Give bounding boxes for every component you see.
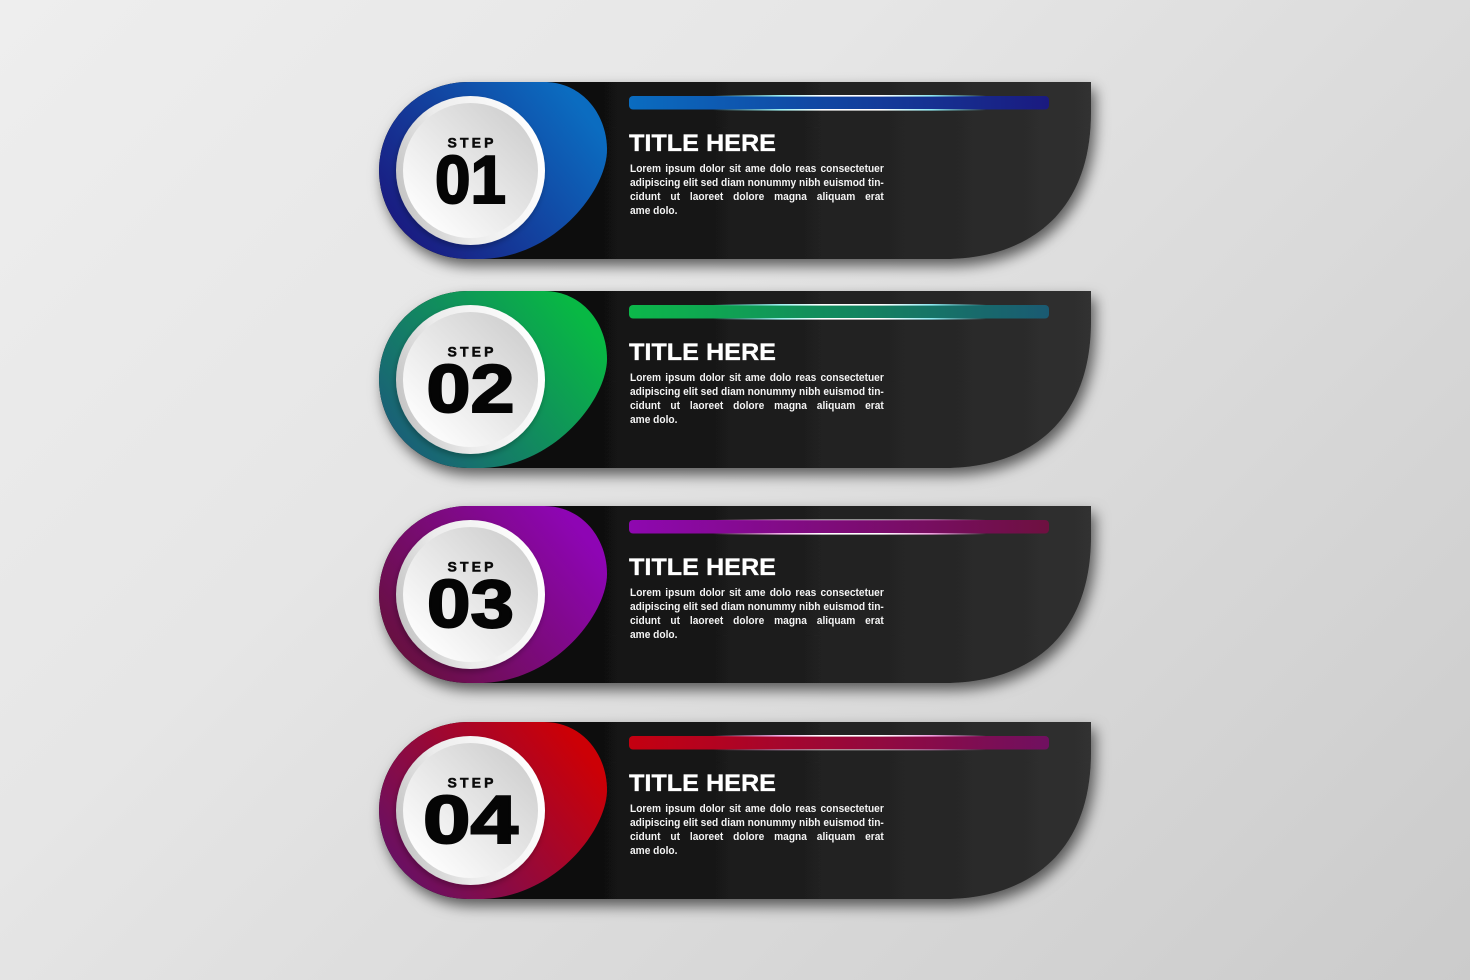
body text — [630, 372, 884, 426]
badge: step number: STEP — [448, 774, 494, 790]
badge: step number: STEP — [448, 558, 494, 574]
body text: ame dolo. — [630, 414, 677, 426]
body text: Lorem ipsum dolor sit ame dolo reas consectetuer — [630, 587, 884, 599]
body text: Lorem ipsum dolor sit ame dolo reas consectetuer — [630, 803, 884, 815]
title: TITLE HERE — [629, 554, 776, 581]
accent bar — [629, 94, 1049, 110]
card background — [379, 722, 1091, 899]
body text: adipiscing elit sed diam nonummy nibh euismod tin- — [630, 601, 884, 613]
body text: adipiscing elit sed diam nonummy nibh euismod tin- — [630, 817, 884, 829]
badge: step number: 03 — [427, 566, 514, 642]
title: TITLE HERE — [629, 770, 776, 797]
title: TITLE HERE — [629, 338, 776, 366]
body text: cidunt ut laoreet dolore magna aliquam erat — [630, 190, 884, 202]
title: TITLE HERE — [629, 130, 776, 156]
body text: Lorem ipsum dolor sit ame dolo reas consectetuer — [630, 372, 884, 384]
card background — [379, 82, 1091, 258]
panel: step 04 — [373, 718, 1105, 916]
body text: ame dolo. — [630, 204, 677, 216]
card background — [379, 290, 1091, 468]
accent bar — [629, 735, 1049, 750]
badge: step number — [396, 304, 545, 454]
panel: step 01 — [373, 78, 1106, 276]
body text: adipiscing elit sed diam nonummy nibh euismod tin- — [630, 176, 884, 188]
body text: adipiscing elit sed diam nonummy nibh euismod tin- — [630, 386, 884, 398]
badge: step number: 02 — [426, 350, 514, 426]
panel: step 02 — [373, 288, 1106, 486]
badge: step number: STEP — [448, 343, 494, 359]
body text: ame dolo. — [630, 629, 677, 641]
coloured blob — [379, 290, 607, 468]
badge: step number — [396, 96, 545, 244]
body text — [630, 803, 884, 857]
coloured blob — [379, 82, 607, 258]
badge: step number: 01 — [435, 142, 506, 218]
badge: step number — [396, 520, 545, 669]
panel: step 03 — [373, 502, 1106, 700]
accent bar — [629, 304, 1049, 319]
body text — [630, 587, 884, 641]
coloured blob — [379, 722, 607, 899]
body text: cidunt ut laoreet dolore magna aliquam erat — [630, 615, 884, 627]
badge: step number: 04 — [423, 782, 518, 858]
body text: Lorem ipsum dolor sit ame dolo reas consectetuer — [630, 162, 884, 174]
body text: cidunt ut laoreet dolore magna aliquam erat — [630, 831, 884, 843]
badge: step number — [396, 736, 545, 885]
body text: ame dolo. — [630, 845, 677, 857]
body text: cidunt ut laoreet dolore magna aliquam erat — [630, 400, 884, 412]
coloured blob — [379, 506, 607, 683]
card background — [379, 506, 1091, 683]
body text — [630, 162, 884, 216]
accent bar — [629, 519, 1049, 535]
badge: step number: STEP — [448, 134, 494, 150]
